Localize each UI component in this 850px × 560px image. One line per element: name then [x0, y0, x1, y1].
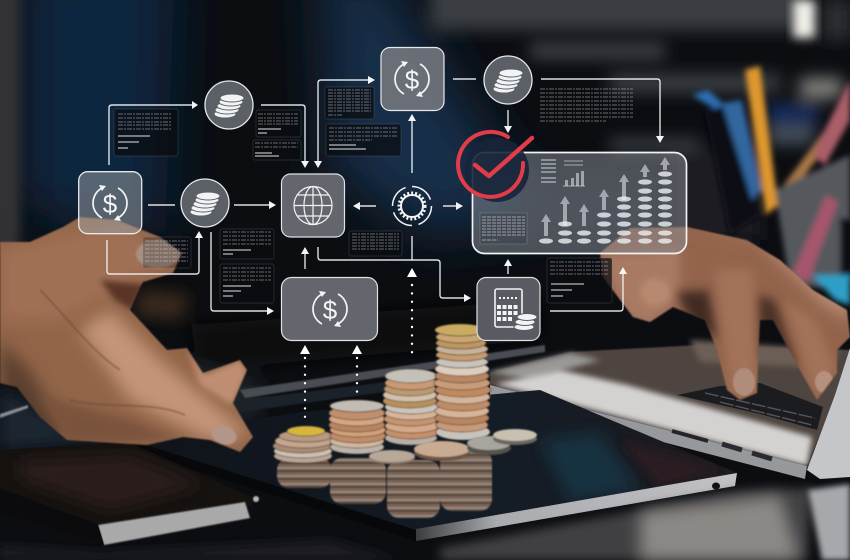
laptop ports: [672, 431, 708, 441]
node: dollar cycle top: $: [405, 65, 420, 95]
keyboard: [677, 383, 823, 430]
node: dollar cycle left: $: [103, 189, 118, 219]
arrowheads: [192, 76, 664, 315]
tablet silver edge: [416, 473, 737, 541]
icon: red check badge: [458, 132, 532, 202]
node: dollar cycle top: [381, 48, 444, 110]
coin stack 2: [329, 400, 386, 454]
node: coins right: [484, 56, 532, 104]
text box progress bars: [118, 129, 584, 296]
phone side edge: [98, 502, 250, 545]
tablet near edge: [130, 440, 416, 541]
left hand: [0, 210, 260, 455]
laptop front edge: [490, 385, 807, 479]
panel text block: [480, 213, 527, 244]
node: dollar cycle left: [79, 172, 142, 234]
coin reflections: [277, 450, 492, 518]
coin stack 3: [383, 369, 439, 445]
node: globe: [282, 174, 344, 237]
coin stack 4: [434, 324, 491, 440]
text box lines: [118, 89, 633, 280]
mid desk tones: [0, 290, 540, 450]
node: coins left: [181, 179, 229, 227]
node: gear: [392, 186, 432, 226]
growth coin columns: [539, 171, 672, 244]
flat coins: [369, 429, 537, 464]
mini bar chart: [541, 160, 585, 186]
lower desk and phone: [0, 443, 850, 560]
dotted upward arrows: [300, 268, 417, 418]
node: coins top: [205, 81, 253, 129]
tablet: [130, 390, 737, 541]
bright deck reflection: [495, 370, 812, 466]
desk edge streaks: [240, 345, 545, 398]
upper right shelf: [430, 0, 850, 240]
laptop screen: [807, 348, 850, 479]
laptop: [490, 340, 850, 479]
node: calculator: [477, 278, 540, 340]
growth arrows: [541, 157, 670, 236]
text boxes: [114, 87, 612, 303]
laptop deck: [490, 345, 850, 465]
node: dollar cycle bottom: [282, 278, 378, 340]
shirt and backdrop: [20, 0, 660, 235]
coin stack 1: [273, 426, 333, 463]
connector lines: [107, 79, 660, 311]
right hand: [599, 226, 850, 400]
node: dollar cycle bottom: $: [323, 295, 338, 325]
phone: [0, 443, 252, 525]
panel: growth chart: [472, 152, 686, 254]
